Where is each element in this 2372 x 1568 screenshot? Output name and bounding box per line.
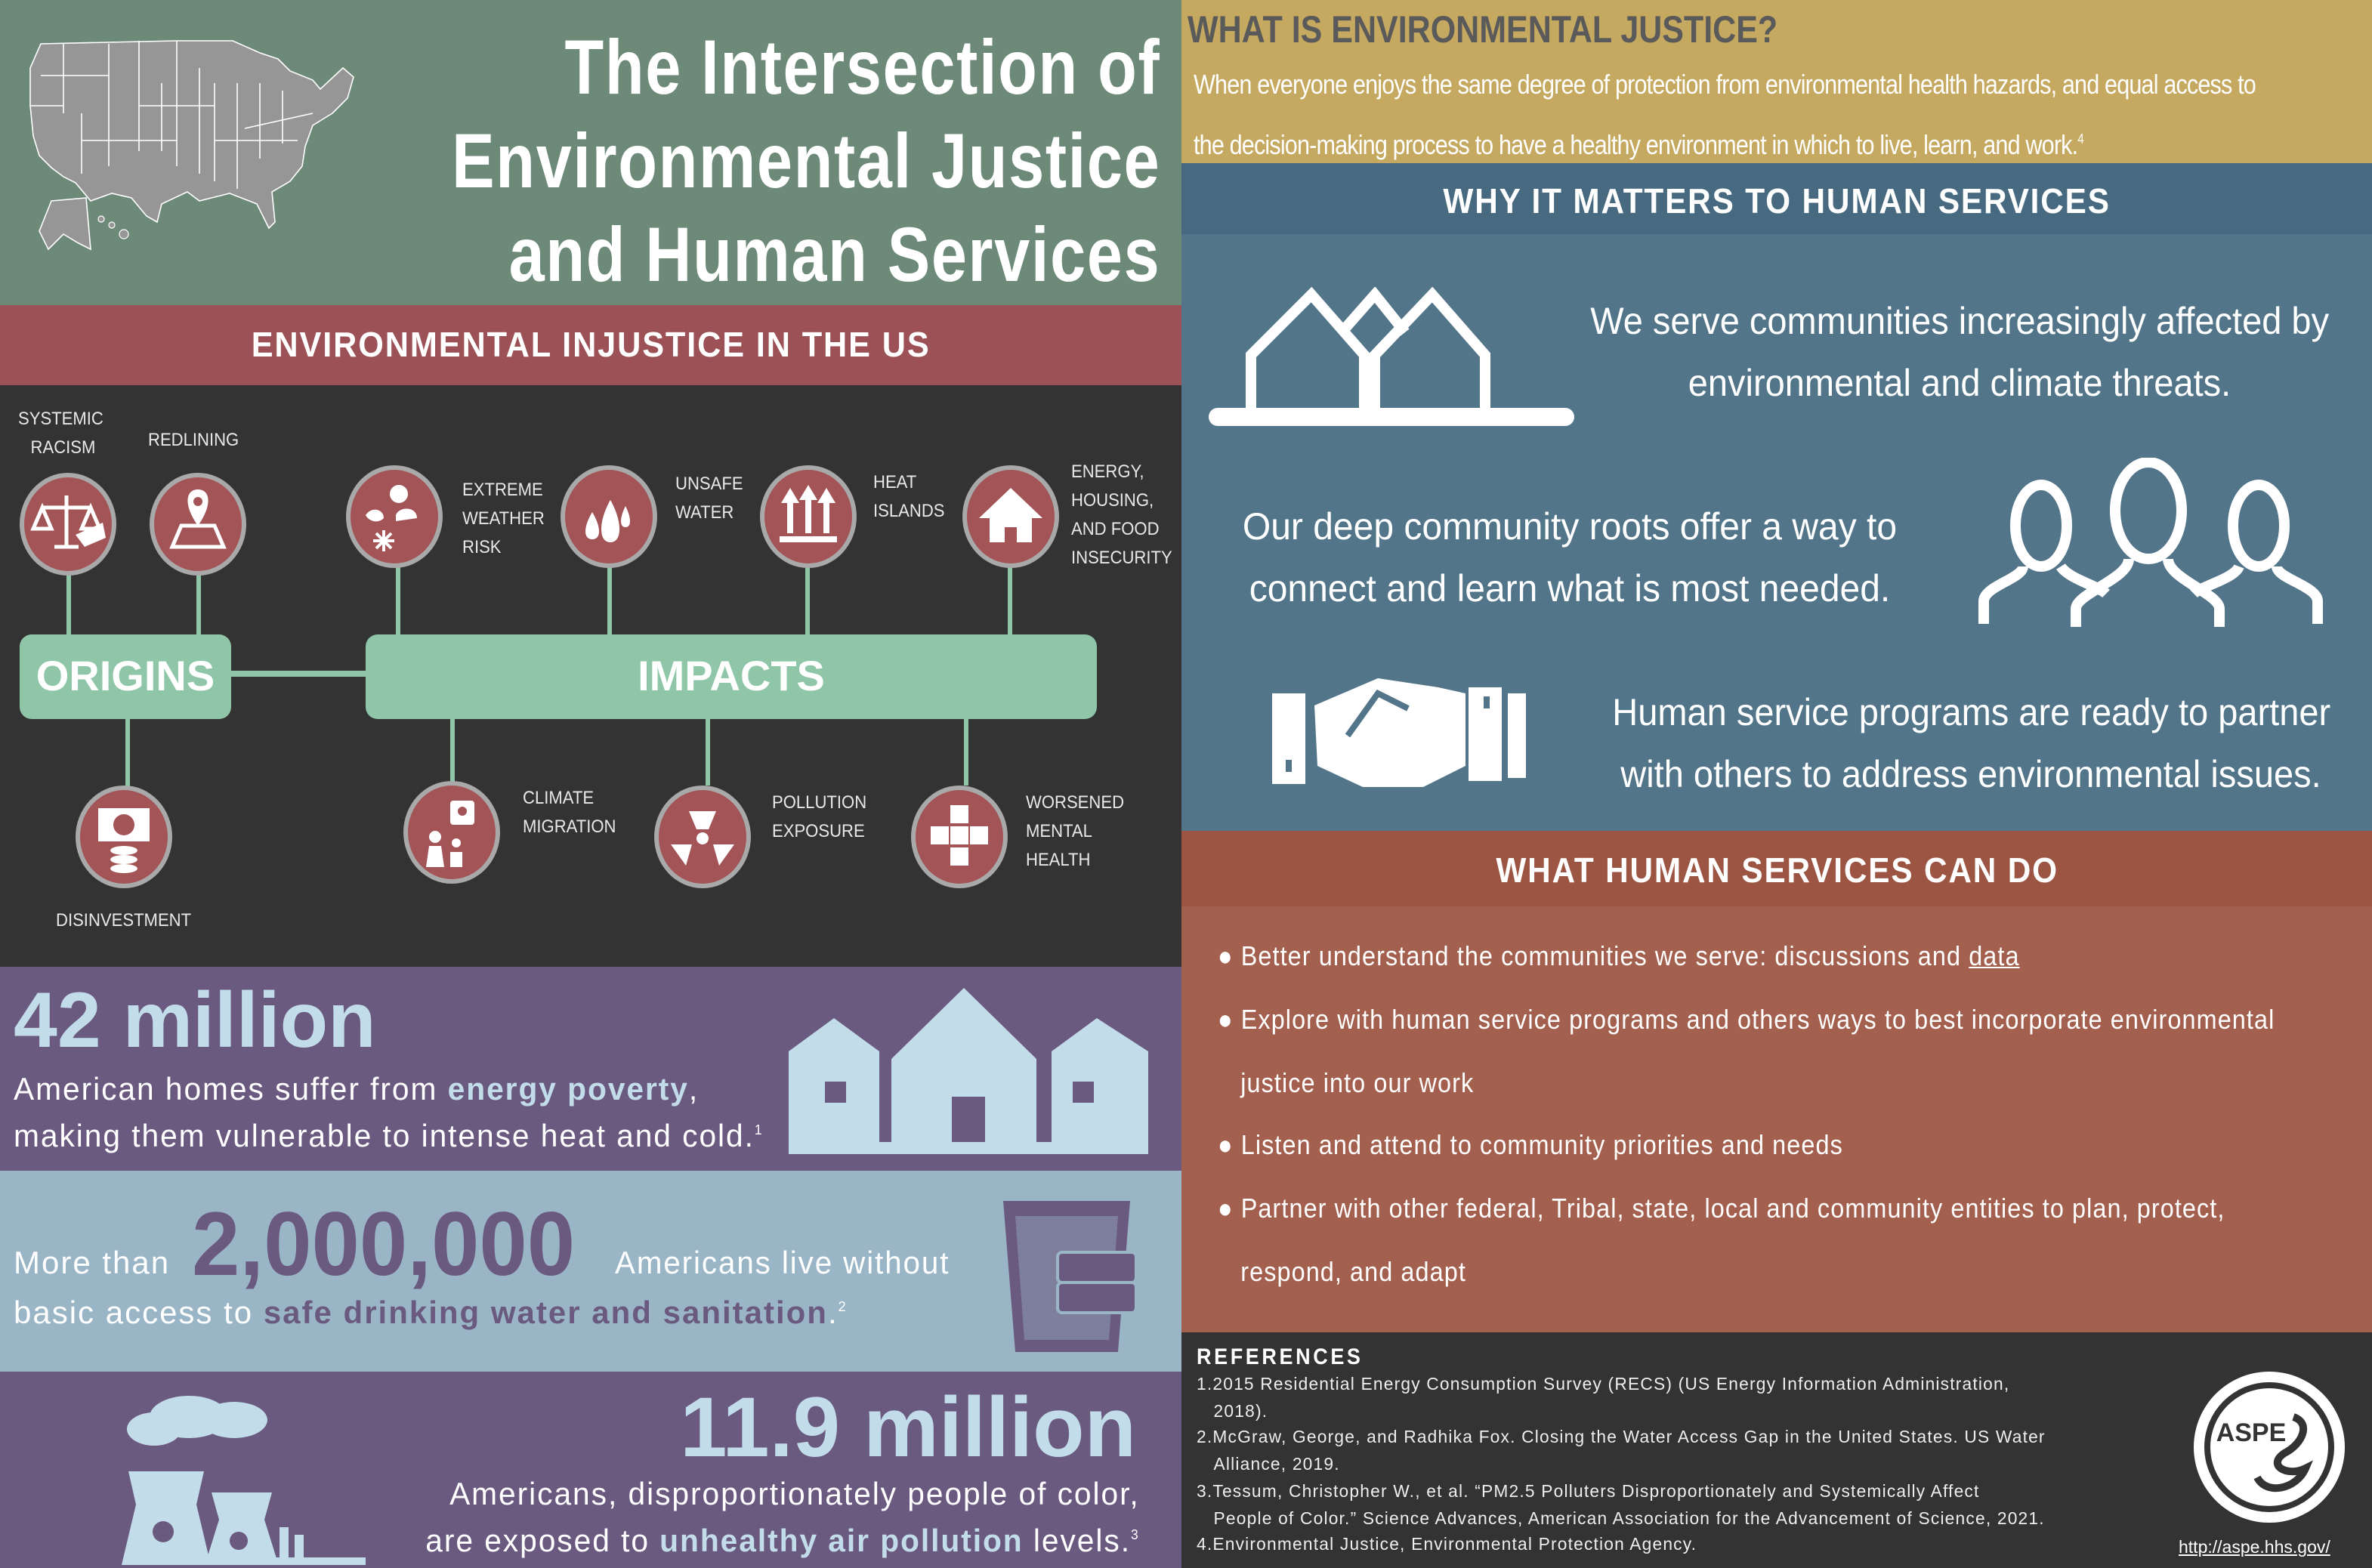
references list: 3.Tessum, Christopher W., et al. “PM2.5 Polluters Disproportionately and Systemically Affect [1197,1483,1980,1502]
panel: 11.9 million stat [0,1372,1181,1568]
link: aspe url: http://aspe.hhs.gov/ [2179,1539,2330,1557]
label: worsened mental health: WORSENED [1026,792,1124,813]
label: pollution exposure: POLLUTION [772,792,866,813]
panel: why it matters [1181,234,2372,831]
references list: Alliance, 2019. [1214,1456,1340,1474]
label: pollution exposure: EXPOSURE [772,820,865,841]
panel: 2,000,000 stat [0,1171,1181,1372]
box: origins [20,634,231,719]
stat number: 42 million [14,977,376,1065]
label: unsafe water: WATER [675,502,734,523]
title text: The Intersection of [564,24,1160,110]
stat text: are exposed to unhealthy air pollution levels.3 [425,1524,1139,1559]
label: systemic racism [18,408,103,458]
references list: 2018). [1214,1403,1268,1421]
icon: house [962,465,1059,568]
title text: Environmental Justice [452,118,1160,204]
text: human service programs [1612,692,2330,796]
label: systemic racism: SYSTEMIC [18,408,103,429]
icon: water cup [1003,1201,1135,1352]
icon: disinvestment [76,786,172,888]
heading: why it matters [1181,163,2372,234]
label: energy housing food: INSECURITY [1071,547,1172,568]
icon: people [1978,458,2323,627]
references list: 4.Environmental Justice, Environmental Protection Agency. [1197,1536,1697,1554]
panel: origins and impacts diagram [0,385,1181,967]
title text: and Human Services [508,211,1160,298]
label: climate migration: CLIMATE [523,787,594,808]
text: deep community roots: Our deep community roots offer a way to [1243,506,1897,548]
references list: 1.2015 Residential Energy Consumption Survey (RECS) (US Energy Information Administration, [1197,1376,2009,1394]
heading: why it matters: WHY IT MATTERS TO HUMAN SERVICES [1443,181,2111,221]
bullet list: justice into our work [1240,1067,1474,1097]
label: extreme weather: RISK [462,536,502,557]
label: unsafe water: UNSAFE [675,473,743,494]
stat number: 11.9 million [680,1379,1136,1474]
panel: what is environmental justice [1181,0,2372,163]
label: heat islands [873,471,945,521]
icon: houses [789,988,1148,1154]
icon: houses outline [1209,287,1574,426]
text: human service programs: Human service programs are ready to partner [1612,692,2330,734]
bullet list: ● Listen and attend to community priorities and needs [1218,1131,1843,1161]
icon: US map [29,40,354,251]
label: extreme weather: WEATHER [462,508,545,529]
label: redlining: REDLINING [148,429,239,450]
icon: climate migration [403,781,500,884]
label: worsened mental health [1026,792,1124,870]
label: worsened mental health: MENTAL [1026,820,1092,841]
bullet list: ● Partner with other federal, Tribal, state, local and community entities to plan, protect, [1218,1193,2225,1224]
label: extreme weather: EXTREME [462,479,543,500]
box: impacts [366,634,1097,719]
panel: references [1181,1332,2372,1568]
label: worsened mental health: HEALTH [1026,849,1090,870]
heading: WHAT IS ENVIRONMENTAL JUSTICE? [1188,9,1777,51]
heading: what human services can do: WHAT HUMAN SERVICES CAN DO [1496,850,2058,890]
label: climate migration [523,787,616,837]
definition text [1194,69,2256,160]
label: unsafe water [675,473,743,523]
text: we serve communities: We serve communities increasingly affected by [1590,301,2329,343]
stat number: 2,000,000 [192,1193,575,1295]
definition text: When everyone enjoys the same degree of protection from environmental health hazards, and equal access to [1194,69,2256,100]
heading: environmental injustice: ENVIRONMENTAL INJUSTICE IN THE US [252,325,930,364]
label: pollution exposure [772,792,866,841]
references list: People of Color.” Science Advances, American Association for the Advancement of Science, 2021. [1214,1510,2045,1528]
bullet list: respond, and adapt [1240,1257,1466,1287]
icon: mental health [911,786,1008,888]
panel: title [0,0,1181,305]
icon: heat islands [760,465,857,568]
panel: 2,000,000 stat: Americans live without [615,1246,950,1281]
icon: power plant [122,1396,366,1565]
label: energy housing food [1071,461,1172,568]
icon: scales [20,473,116,576]
label: systemic racism: RACISM [31,437,95,458]
logo: ASPE: ASPE [2216,1418,2286,1447]
bullet list: ● Better understand the communities we serve: discussions and data [1218,941,2020,971]
box: origins: ORIGINS [36,653,215,699]
text: human service programs: with others to address environmental issues. [1620,754,2321,796]
logo: ASPE [2194,1372,2345,1523]
stat text [14,1073,764,1154]
label: heat islands: HEAT [873,471,916,492]
references list: 2.McGraw, George, and Radhika Fox. Closing the Water Access Gap in the United States. US Water [1197,1430,2046,1448]
references heading: REFERENCES [1197,1344,1364,1370]
label: energy housing food: ENERGY, [1071,461,1144,482]
icon: radiation [654,786,751,888]
icon: extreme weather [346,465,443,568]
icon: redlining map pin [150,473,246,576]
text: we serve communities: environmental and climate threats. [1688,363,2231,405]
title text [452,24,1160,298]
stat text: Americans, disproportionately people of color, [449,1477,1139,1512]
panel: what human services can do list [1181,906,2372,1332]
label: heat islands: ISLANDS [873,500,945,521]
label: energy housing food: AND FOOD [1071,518,1160,539]
icon: handshake [1272,678,1526,787]
label: energy housing food: HOUSING, [1071,489,1154,511]
label: climate migration: MIGRATION [523,816,616,837]
stat text line 2: basic access to safe drinking water and sanitation.2 [14,1296,848,1331]
label: disinvestment: DISINVESTMENT [56,909,191,931]
heading: what human services can do [1181,831,2372,906]
stat text [425,1477,1139,1559]
bullet list [1218,941,2275,1287]
definition text: the decision-making process to have a healthy environment in which to live, learn, and work.4 [1194,130,2083,160]
bullet list: ● Explore with human service programs and others ways to best incorporate environmental [1218,1005,2275,1035]
text: we serve communities [1590,301,2329,405]
stat text line 1: More than [14,1246,170,1281]
text: deep community roots: connect and learn what is most needed. [1249,568,1890,610]
references list [1197,1376,2046,1554]
box: impacts: IMPACTS [638,653,825,699]
label: extreme weather [462,479,545,557]
heading: environmental injustice [0,305,1181,385]
stat text: American homes suffer from energy poverty, [14,1073,699,1107]
panel: 42 million stat [0,967,1181,1171]
text: deep community roots [1243,506,1897,610]
icon: unsafe water [561,465,657,568]
stat text: making them vulnerable to intense heat and cold.1 [14,1119,764,1154]
